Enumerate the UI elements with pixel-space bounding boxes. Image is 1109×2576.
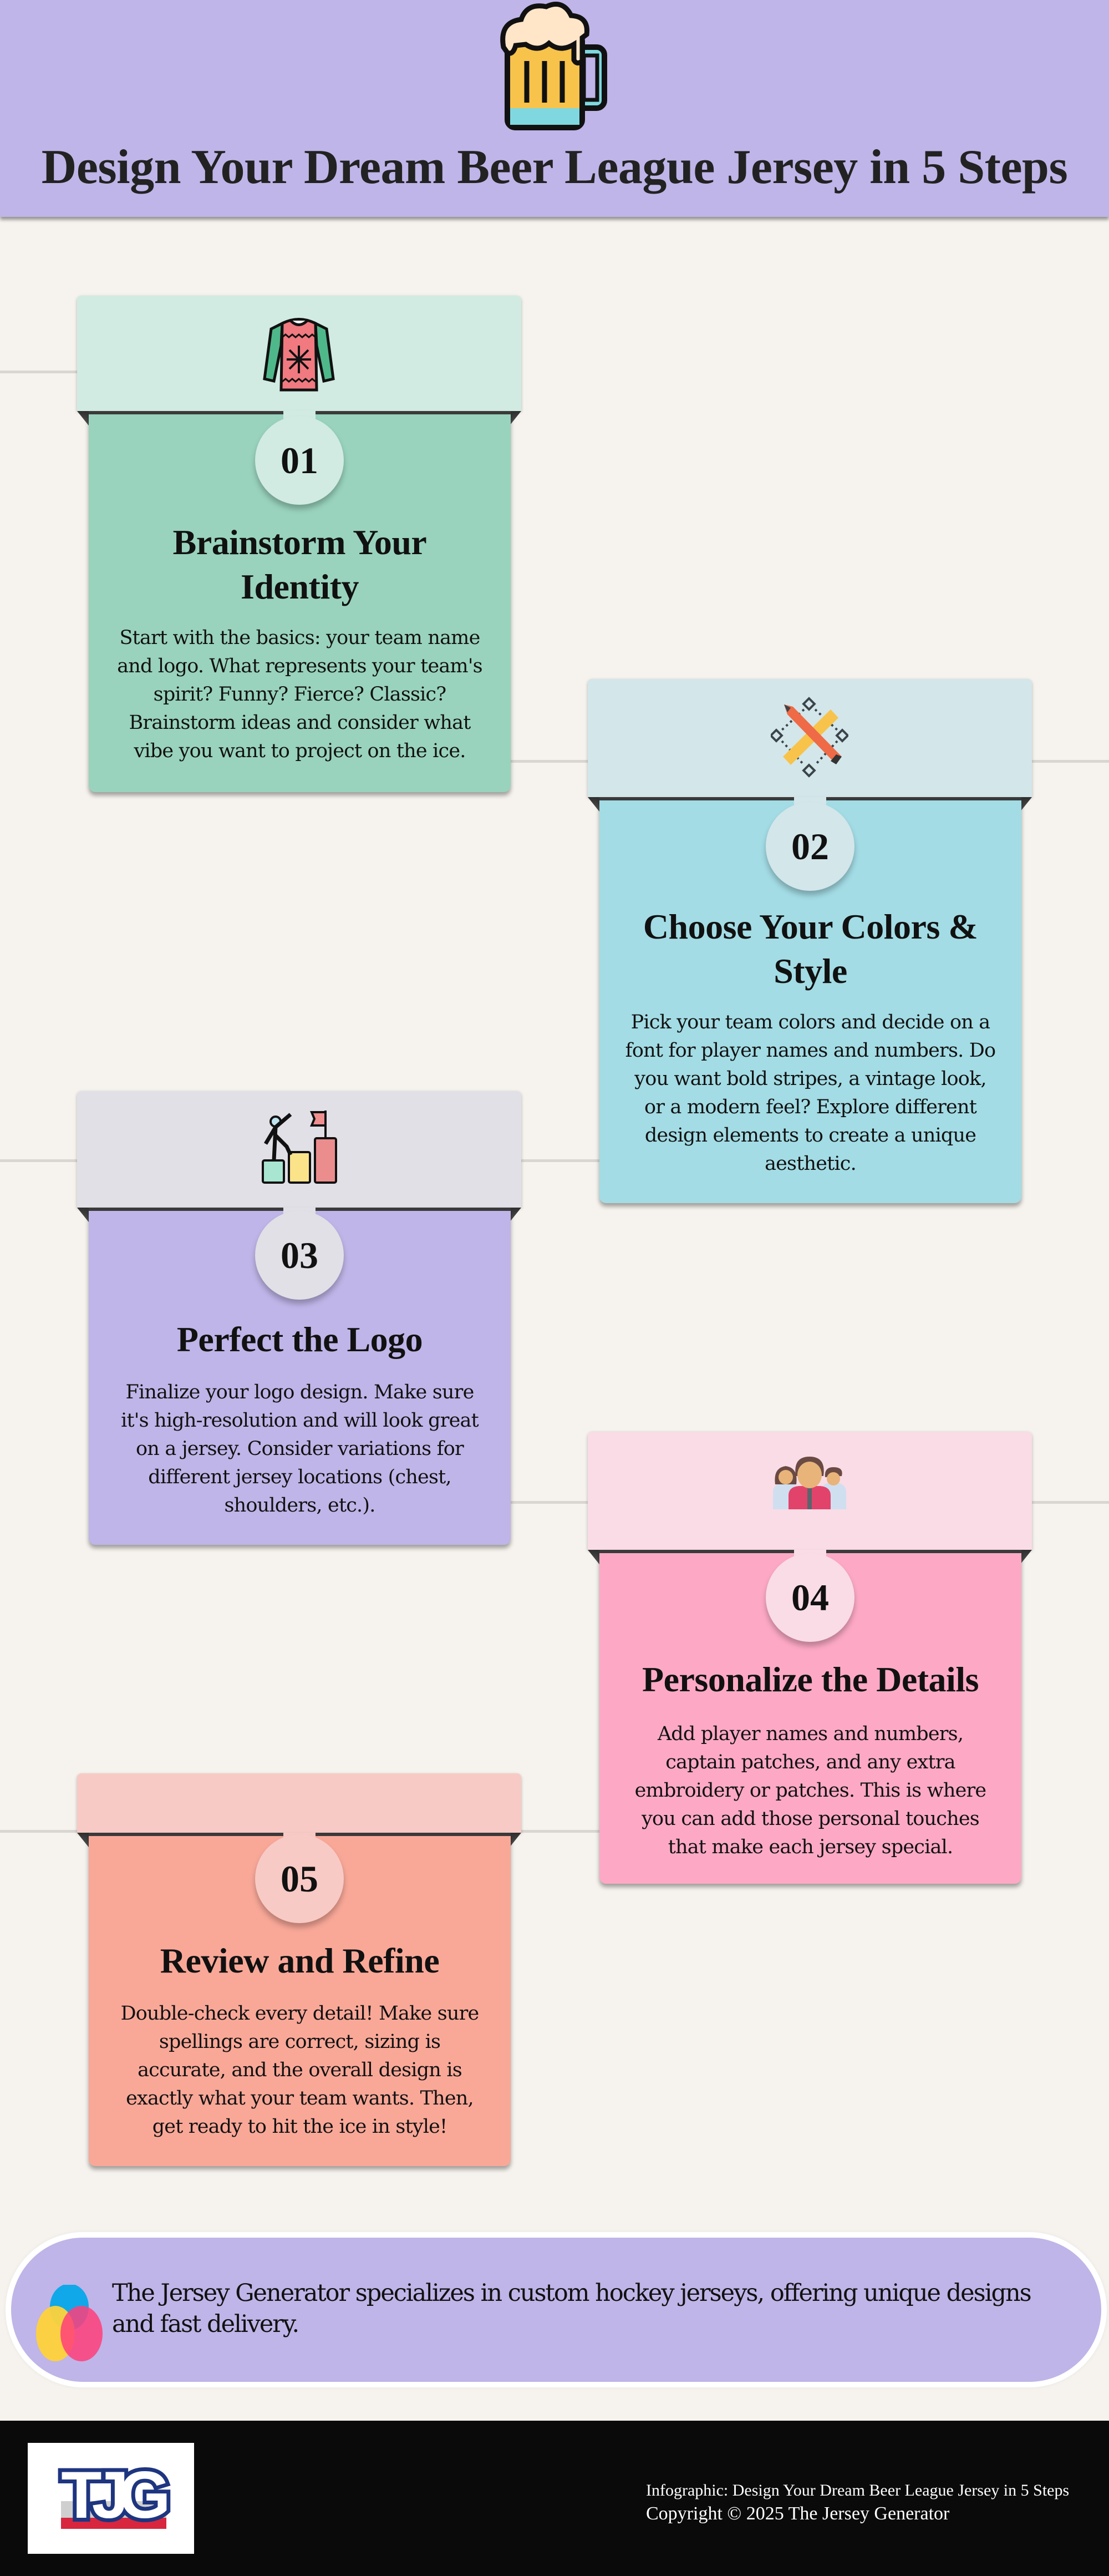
body text: step 1: Start with the basics: your team name (120, 627, 480, 649)
text card: step 2 (599, 797, 1021, 1203)
body text: step 1: and logo. What represents your team's (117, 655, 482, 677)
text: about: The Jersey Generator specializes in custom hockey jerseys, offering unique designs (112, 2279, 1031, 2307)
body text: step 2: design elements to create a unique (645, 1124, 976, 1147)
icon panel: step 3 (77, 1091, 521, 1208)
icon panel: step 4 (588, 1432, 1032, 1550)
header tab: step 5 (77, 1773, 521, 1833)
number badge 01: 01 (281, 439, 318, 481)
number badge 05 (255, 1834, 344, 1923)
body text: step 4: that make each jersey special. (668, 1836, 953, 1858)
body text: step 2: or a modern feel? Explore different (644, 1096, 976, 1118)
footer (0, 2421, 1109, 2576)
body text: step 4 (635, 1723, 986, 1858)
icon: color circles (36, 2285, 103, 2361)
footer text (646, 2481, 1069, 2524)
body text: step 1: spirit? Funny? Fierce? Classic? (154, 683, 446, 706)
icon panel: step 2 (588, 679, 1032, 797)
body text: step 5 (121, 2002, 479, 2138)
heading: step 2 (643, 907, 978, 991)
title: Design Your Dream Beer League Jersey in 5 Steps (42, 140, 1067, 194)
icon panel: step 1 (77, 296, 521, 411)
body text: step 2: aesthetic. (765, 1153, 856, 1175)
panel: step 1 (75, 295, 523, 798)
heading: step 4: Personalize the Details (642, 1660, 979, 1699)
header (0, 0, 1109, 217)
body text: step 3: it's high-resolution and will look great (121, 1409, 479, 1432)
panel: step 5 (75, 1773, 523, 2172)
body text: step 5: Double-check every detail! Make sure (121, 2002, 479, 2025)
number badge 03 (255, 1211, 344, 1300)
body text: step 3: on a jersey. Consider variations for (136, 1438, 464, 1460)
number badge 01 (255, 416, 344, 505)
heading: step 1: Brainstorm Your (173, 523, 426, 562)
body text: step 5: exactly what your team wants. Then, (126, 2087, 474, 2110)
text card: step 4 (599, 1550, 1021, 1884)
icon: sweater (263, 318, 335, 392)
icon: climber with flag (262, 1110, 337, 1184)
body text: step 4: you can add those personal touches (642, 1808, 979, 1830)
number badge 03: 03 (281, 1234, 318, 1276)
icon: team people (773, 1457, 846, 1509)
heading: step 2: Choose Your Colors & (643, 907, 978, 946)
body text: step 3: Finalize your logo design. Make sure (125, 1381, 474, 1403)
panel: step 4 (586, 1431, 1034, 1890)
body text: step 1 (117, 627, 482, 762)
panel: step 2 (586, 678, 1034, 1209)
text: about: and fast delivery. (112, 2310, 298, 2338)
heading: step 2: Style (774, 951, 847, 991)
heading: step 3: Perfect the Logo (177, 1320, 423, 1359)
text: about (112, 2279, 1031, 2338)
text card: step 3 (89, 1208, 511, 1545)
panel: step 3 (75, 1091, 523, 1551)
footer text: Infographic: Design Your Dream Beer League Jersey in 5 Steps (646, 2481, 1069, 2499)
footer text: Copyright © 2025 The Jersey Generator (646, 2503, 949, 2524)
logo: TJG (28, 2443, 194, 2554)
body text: step 3: shoulders, etc.). (224, 1494, 375, 1517)
body text: step 3: different jersey locations (chest, (148, 1466, 451, 1488)
body text: step 4: Add player names and numbers, (658, 1723, 963, 1745)
icon: beer mug (500, 2, 607, 130)
body text: step 1: vibe you want to project on the ice. (134, 740, 466, 762)
body text: step 2: Pick your team colors and decide on a (631, 1011, 990, 1033)
body text: step 4: embroidery or patches. This is where (635, 1779, 986, 1802)
number badge 04: 04 (791, 1576, 829, 1619)
number badge 02 (766, 802, 854, 891)
body text: step 5: accurate, and the overall design is (138, 2059, 462, 2081)
body text: step 2: you want bold stripes, a vintage look, (634, 1068, 986, 1090)
number badge 04 (766, 1553, 854, 1642)
text card: step 5 (89, 1833, 511, 2166)
body text: step 2: font for player names and numbers. Do (625, 1039, 995, 1062)
number badge 05: 05 (281, 1857, 318, 1899)
body text: step 2 (625, 1011, 995, 1175)
callout: about banner (6, 2232, 1107, 2387)
body text: step 5: spellings are correct, sizing is (159, 2031, 440, 2053)
text card: step 1 (89, 411, 511, 792)
heading: step 1: Identity (241, 567, 359, 606)
body text: step 4: captain patches, and any extra (665, 1751, 955, 1773)
body text: step 5: get ready to hit the ice in style! (152, 2116, 447, 2138)
number badge 02: 02 (791, 825, 829, 868)
heading: step 1 (173, 523, 426, 606)
heading: step 5: Review and Refine (160, 1941, 439, 1980)
icon: pencil and ruler (771, 697, 848, 778)
body text: step 3 (121, 1381, 479, 1517)
body text: step 1: Brainstorm ideas and consider what (129, 712, 470, 734)
